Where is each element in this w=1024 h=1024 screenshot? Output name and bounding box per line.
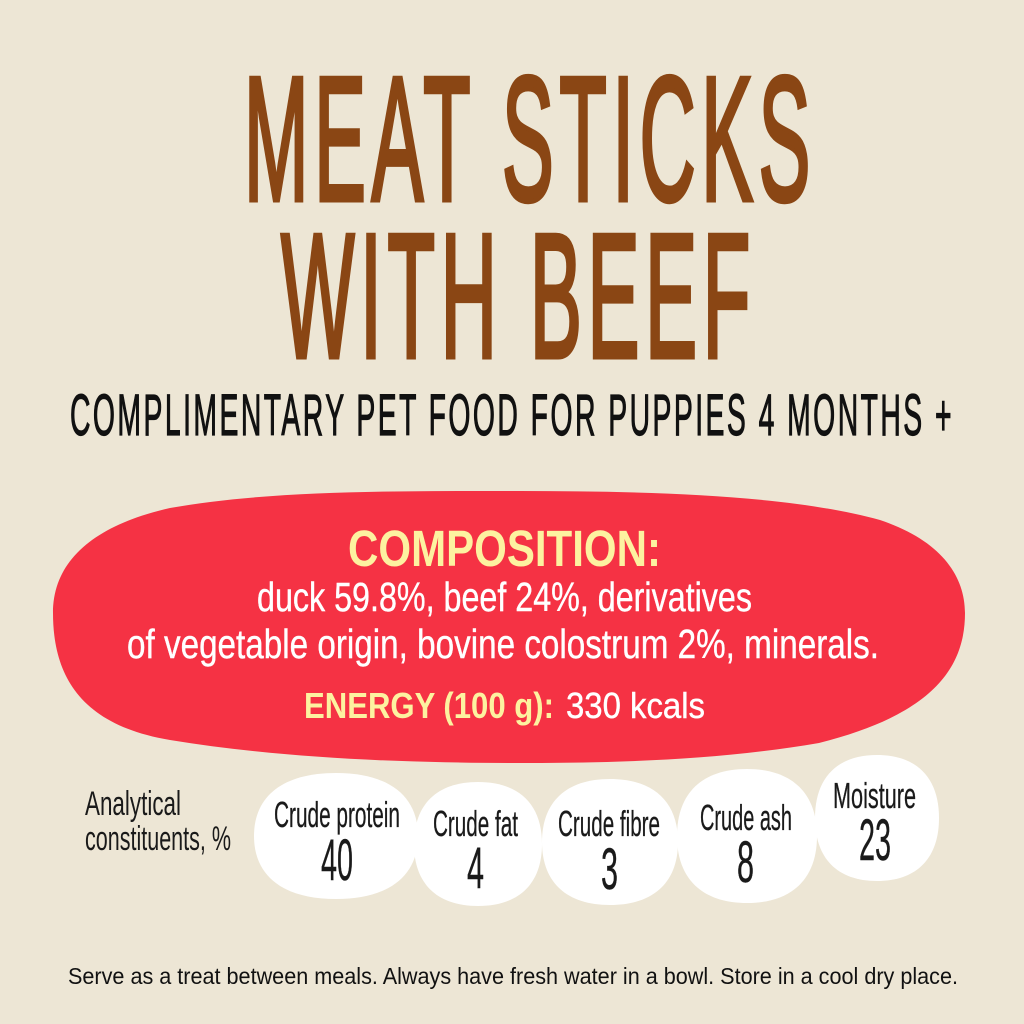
bubble: crude protein xyxy=(254,773,418,899)
footer note: Serve as a treat between meals. Always have fresh water in a bowl. Store in a cool dry place. xyxy=(68,963,958,989)
panel: composition xyxy=(53,491,965,763)
bubble: crude protein: 40 xyxy=(321,828,353,893)
composition text: duck 59.8%, beef 24%, derivatives xyxy=(257,574,752,620)
bubble: crude fibre xyxy=(542,779,678,905)
analytical constituents label: constituents, % xyxy=(85,820,231,858)
analytical constituents label xyxy=(85,785,231,858)
bubble: crude fat: 4 xyxy=(467,836,484,901)
bubble: crude ash: Crude ash xyxy=(700,797,792,838)
bubble: crude fibre: Crude fibre xyxy=(558,803,660,844)
red blob background xyxy=(53,491,965,763)
energy line: 330 kcals xyxy=(566,685,705,726)
bubble: crude fat: Crude fat xyxy=(433,803,518,844)
bubble: crude ash xyxy=(677,769,817,903)
analytical constituents label: Analytical xyxy=(85,785,181,823)
bubble: crude fibre: 3 xyxy=(601,837,618,902)
composition text xyxy=(127,574,879,667)
bubble: moisture: Moisture xyxy=(833,775,916,816)
bubble: crude fat xyxy=(414,782,542,906)
bubble: crude ash: 8 xyxy=(737,830,754,895)
energy line: ENERGY (100 g): xyxy=(304,685,554,726)
title xyxy=(244,40,816,395)
bubble: moisture xyxy=(815,755,939,881)
composition heading: COMPOSITION: xyxy=(348,520,661,577)
bubble: moisture: 23 xyxy=(859,808,891,873)
bubble: crude protein: Crude protein xyxy=(274,794,400,835)
